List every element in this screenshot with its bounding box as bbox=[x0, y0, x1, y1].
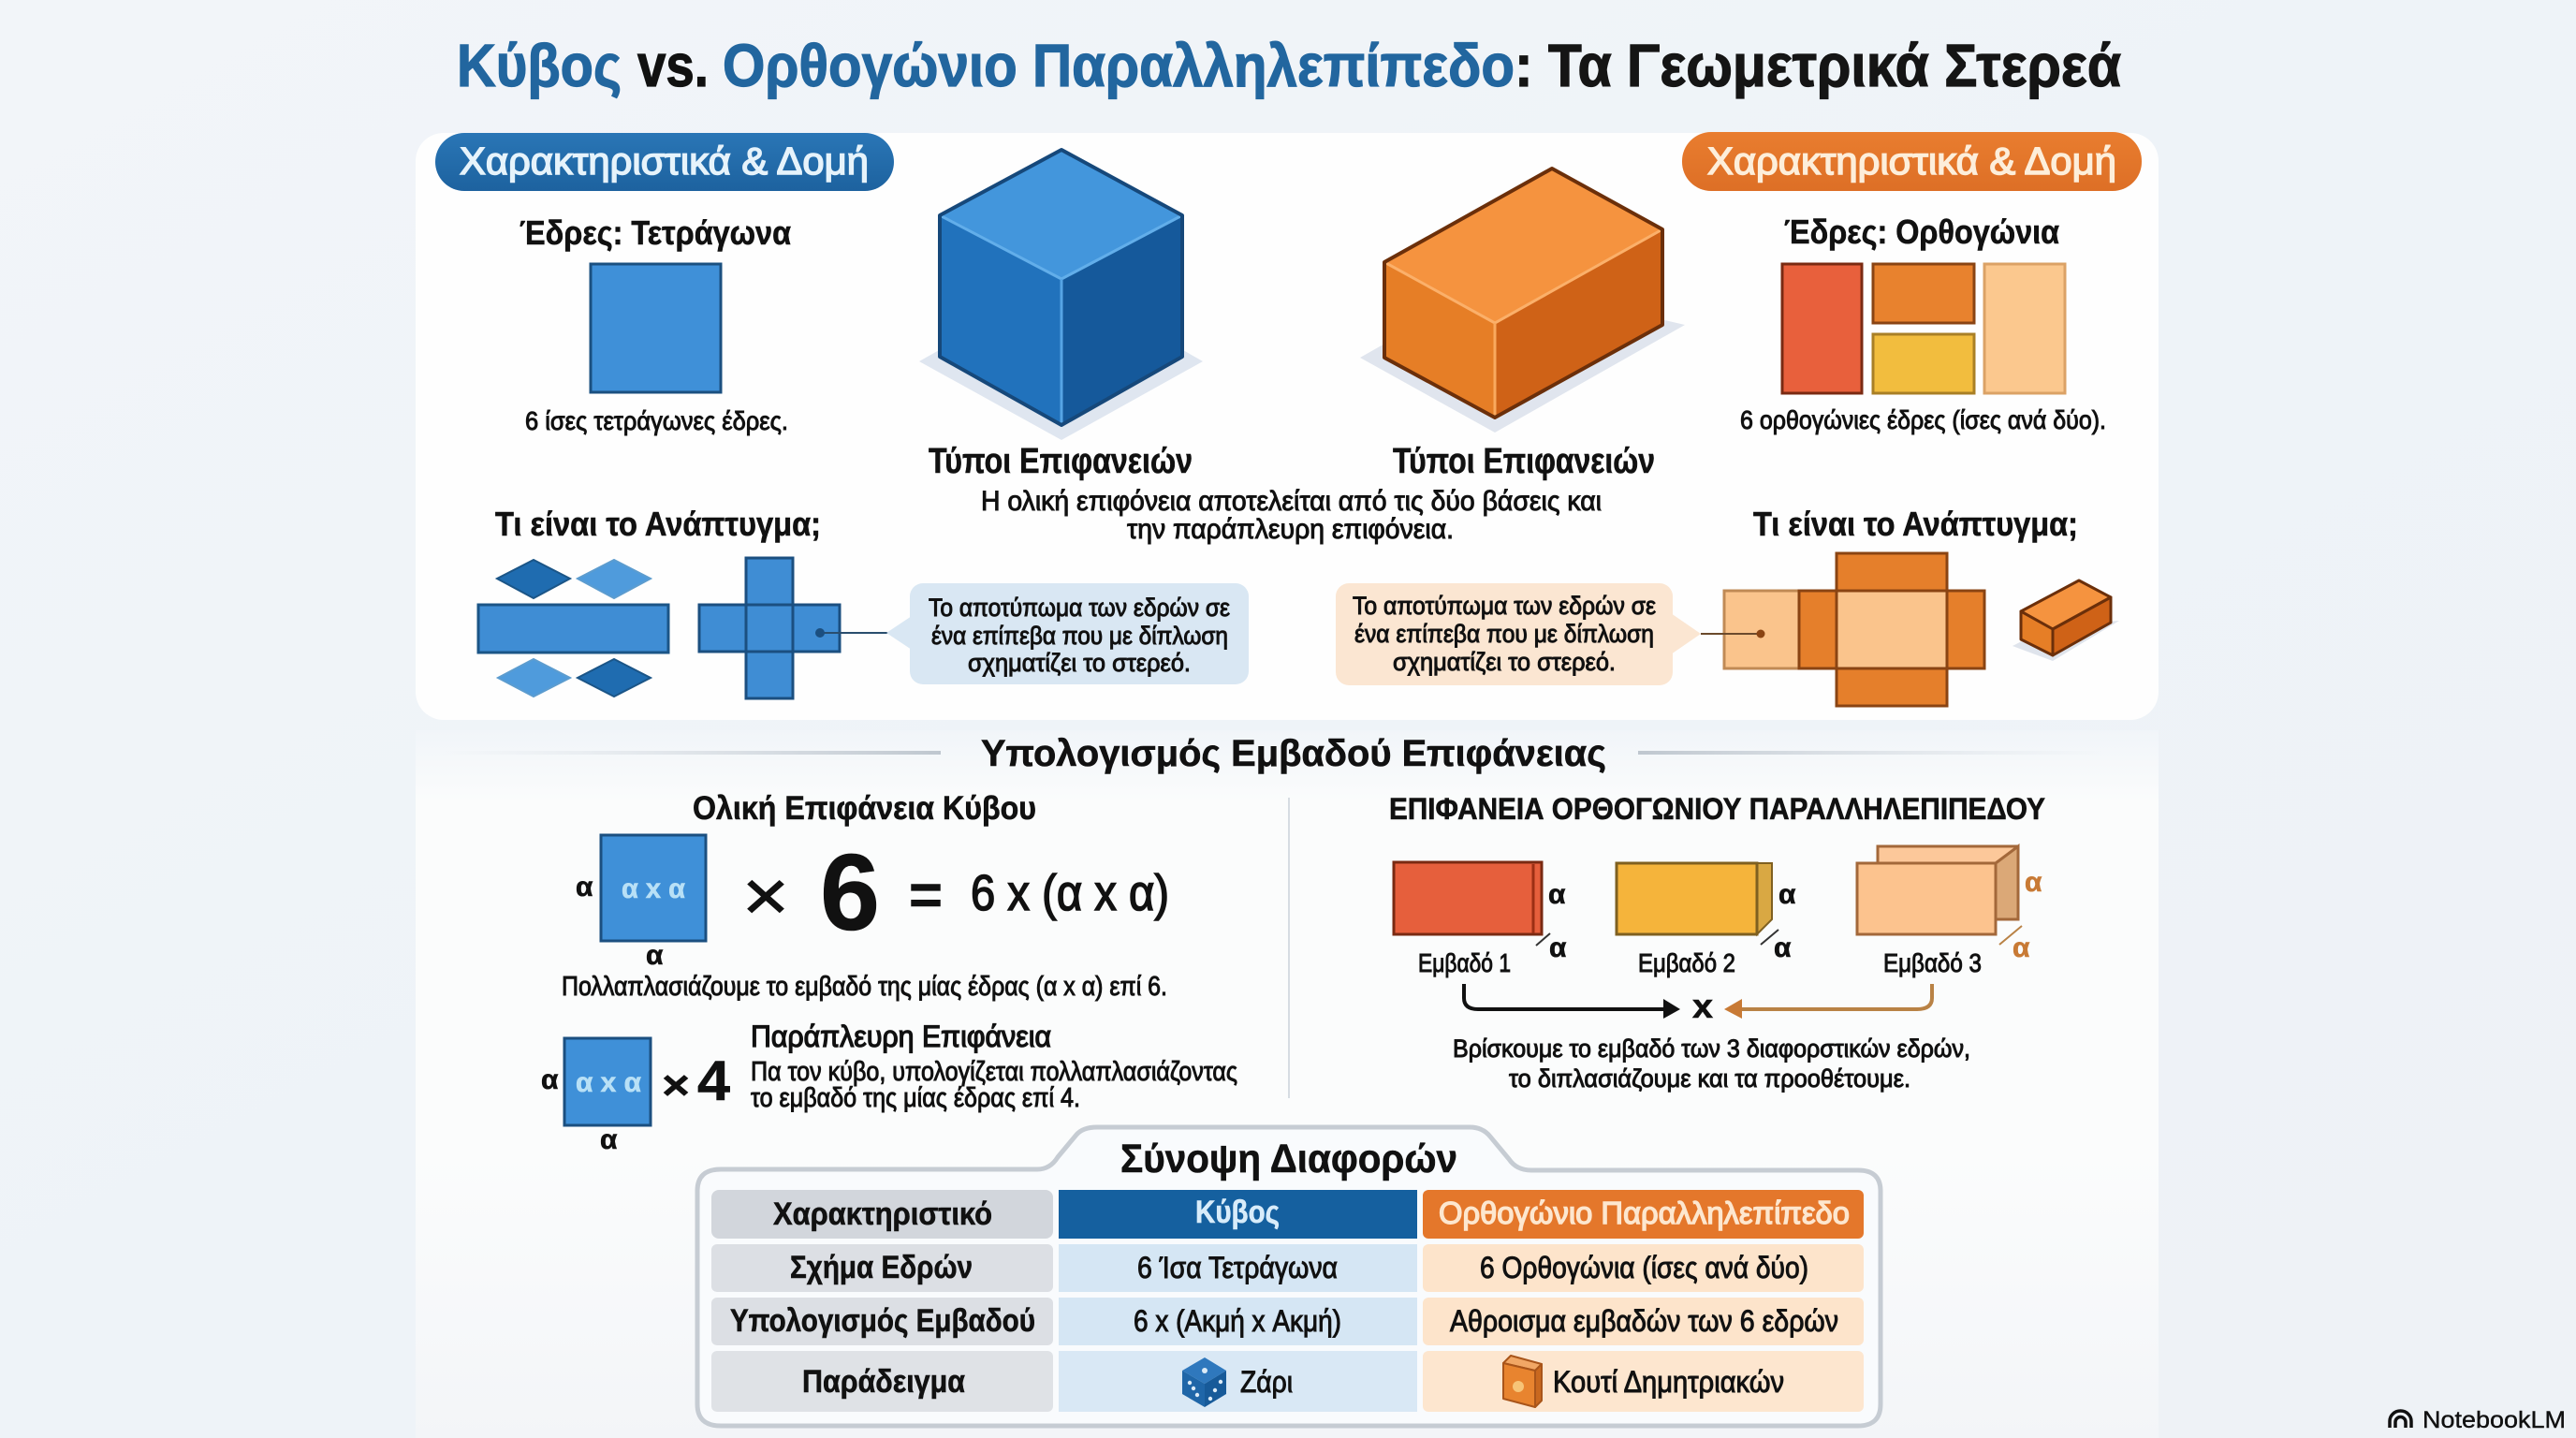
table column: cube: 6 Ίσα Τετράγωνα bbox=[1137, 1251, 1338, 1284]
callout: cuboid net definition bbox=[1336, 583, 1701, 685]
panel: cuboid surface bbox=[1389, 792, 2045, 1093]
icon: dice bbox=[1182, 1357, 1226, 1407]
icon: rectangular faces bbox=[1782, 264, 2065, 393]
cube faces block: 6 ίσες τετράγωνες έδρες. bbox=[525, 406, 788, 435]
icon: prism net bbox=[478, 560, 668, 697]
callout: cuboid net definition: σχηματίζει το στερεό. bbox=[1393, 648, 1616, 676]
cuboid faces block: Έδρες: Ορθογώνια bbox=[1784, 213, 2059, 251]
panel: cuboid surface: Εμβαδό 3 bbox=[1883, 948, 1982, 977]
section heading: surface area calculation bbox=[440, 733, 2106, 774]
callout: cube net definition bbox=[886, 583, 1249, 684]
formula: × bbox=[742, 857, 789, 936]
panel: cube total surface: α bbox=[576, 872, 593, 902]
badge: cuboid characteristics bbox=[1682, 132, 2142, 191]
table column: cuboid: Αθροισμα εμβαδών των 6 εδρών bbox=[1450, 1304, 1838, 1338]
title: : Τα Γεωμετρικά Στερεά bbox=[1515, 32, 2121, 99]
table column: features: Χαρακτηριστικό bbox=[773, 1196, 992, 1232]
icon: area 2 yellow face bbox=[1617, 863, 1778, 945]
formula bbox=[742, 831, 1169, 953]
badge: cube characteristics bbox=[435, 133, 894, 191]
surface types headings and description: την παράπλευρη επιφόνεια. bbox=[1127, 514, 1454, 545]
table column: cuboid: 6 Ορθογώνια (ίσες ανά δύο) bbox=[1480, 1251, 1808, 1284]
surface types headings and description: Τύποι Επιφανειών bbox=[1393, 442, 1655, 481]
badge: cube characteristics: Χαρακτηριστικά & Δομή bbox=[460, 139, 869, 183]
table column: cube bbox=[1059, 1190, 1417, 1412]
logo: NotebookLM: NotebookLM bbox=[2422, 1407, 2566, 1433]
table column: cuboid bbox=[1423, 1190, 1864, 1412]
panel: cuboid surface: Βρίσκουμε το εμβαδό των 3 διαφορστικών εδρών, bbox=[1453, 1034, 1970, 1063]
cube net block bbox=[478, 505, 889, 698]
section heading: surface area calculation: Υπολογισμός Εμβαδού Επιφάνειας bbox=[981, 733, 1606, 774]
surface types headings and description: Τύποι Επιφανειών bbox=[929, 442, 1193, 481]
cuboid net block bbox=[1701, 505, 2119, 706]
panel: cube lateral surface: το εμβαδό της μίας έδρας επί 4. bbox=[751, 1083, 1080, 1113]
icon: lateral face a x a bbox=[564, 1038, 651, 1125]
table column: features bbox=[711, 1190, 1053, 1412]
surface types headings and description bbox=[929, 442, 1655, 545]
formula: 6 x (α x α) bbox=[971, 865, 1169, 921]
icon: face a x a bbox=[601, 835, 706, 941]
title: Κύβος bbox=[457, 32, 622, 99]
table column: cube: 6 x (Ακμή x Ακμή) bbox=[1134, 1304, 1341, 1338]
panel: cube lateral surface: Παράπλευρη Επιφάνεια bbox=[751, 1020, 1051, 1053]
callout: cuboid net definition: Το αποτύπωμα των εδρών σε bbox=[1353, 592, 1656, 620]
icon: cereal box bbox=[1503, 1356, 1542, 1407]
cuboid faces block: 6 ορθογώνιες έδρες (ίσες ανά δύο). bbox=[1740, 405, 2106, 434]
formula: = bbox=[909, 863, 943, 928]
callout: cuboid net definition: ένα επίπεβα που με δίπλωση bbox=[1354, 620, 1654, 648]
title: vs. bbox=[637, 32, 709, 99]
panel: cuboid surface: το διπλασιάζουμε και τα προοθέτουμε. bbox=[1509, 1064, 1910, 1093]
icon: area 3 peach face bbox=[1857, 846, 2022, 945]
panel: cuboid surface: α bbox=[1548, 879, 1566, 910]
icon: cross net bbox=[699, 558, 840, 698]
title: Ορθογώνιο Παραλληλεπίπεδο bbox=[723, 32, 1515, 99]
panel: cube lateral surface: α bbox=[600, 1124, 618, 1155]
table column: features: Παράδειγμα bbox=[802, 1364, 965, 1400]
badge: cuboid characteristics: Χαρακτηριστικά & Δομή bbox=[1707, 139, 2116, 183]
table column: cuboid: Κουτί Δημητριακών bbox=[1553, 1365, 1784, 1399]
panel: cuboid surface: α bbox=[1774, 932, 1792, 963]
arrow: orange to multiply bbox=[1724, 984, 1932, 1019]
panel: cuboid surface: α bbox=[2025, 867, 2042, 898]
icon: face a x a: α x α bbox=[622, 873, 686, 904]
title bbox=[457, 32, 2121, 99]
panel: characteristics and structure bbox=[416, 133, 2159, 720]
table column: features: Υπολογισμός Εμβαδού bbox=[730, 1303, 1035, 1339]
panel: cube lateral surface: × bbox=[662, 1063, 690, 1108]
table: comparison bbox=[711, 1190, 1864, 1412]
callout: cube net definition: σχηματίζει το στερεό. bbox=[968, 649, 1191, 677]
icon: square face bbox=[591, 264, 721, 392]
panel: cube total surface: Πολλαπλασιάζουμε το εμβαδό της μίας έδρας (α x α) επί 6. bbox=[562, 972, 1167, 1002]
arrow: black to multiply bbox=[1464, 984, 1680, 1019]
panel: cuboid surface: ΕΠΙΦΑΝΕΙΑ ΟΡΘΟΓΩΝΙΟΥ ΠΑΡΑΛΛΗΛΕΠΙΠΕΔΟΥ bbox=[1389, 792, 2045, 826]
table column: cube: Ζάρι bbox=[1240, 1365, 1293, 1399]
panel: cube lateral surface: Πα τον κύβο, υπολογίζεται πολλαπλασιάζοντας bbox=[751, 1057, 1237, 1087]
panel: cube total surface bbox=[562, 790, 1169, 1002]
panel: cube total surface: Ολική Επιφάνεια Κύβου bbox=[693, 790, 1036, 827]
cube faces block: Έδρες: Τετράγωνα bbox=[520, 213, 791, 252]
icon: area 1 red face bbox=[1394, 862, 1550, 946]
icon: cuboid net bbox=[1724, 553, 1984, 706]
panel: cube lateral surface bbox=[541, 1020, 1237, 1155]
panel: cuboid surface: Εμβαδό 1 bbox=[1418, 948, 1511, 977]
cube net block: Τι είναι το Ανάπτυγμα; bbox=[495, 505, 821, 543]
panel: summary of differences: Σύνοψη Διαφορών bbox=[1120, 1137, 1457, 1181]
table column: features: Σχήμα Εδρών bbox=[790, 1250, 973, 1285]
panel: cuboid surface: Εμβαδό 2 bbox=[1638, 948, 1735, 977]
table column: cuboid: Ορθογώνιο Παραλληλεπίπεδο bbox=[1439, 1196, 1850, 1230]
panel: cuboid surface: α bbox=[1778, 879, 1796, 910]
panel: cuboid surface: α bbox=[1549, 932, 1567, 963]
panel: cube lateral surface: α bbox=[541, 1064, 559, 1095]
cube faces block bbox=[520, 213, 791, 435]
surface types headings and description: Η ολική επιφόνεια αποτελείται από τις δύο βάσεις και bbox=[981, 486, 1602, 517]
panel: cube lateral surface: 4 bbox=[697, 1049, 731, 1112]
icon: small cuboid bbox=[2012, 580, 2119, 661]
callout: cube net definition: ένα επίπεβα που με δίπλωση bbox=[931, 622, 1228, 650]
panel: cuboid surface: x bbox=[1692, 987, 1713, 1025]
panel: cuboid surface: α bbox=[2012, 932, 2030, 963]
panel: cube total surface: α bbox=[646, 940, 664, 971]
cuboid net block: Τι είναι το Ανάπτυγμα; bbox=[1753, 505, 2078, 543]
icon: 3D blue cube bbox=[919, 150, 1203, 440]
icon: lateral face a x a: α x α bbox=[576, 1067, 642, 1098]
formula: 6 bbox=[820, 831, 880, 953]
callout: cube net definition: Το αποτύπωμα των εδρών σε bbox=[929, 594, 1230, 622]
cuboid faces block bbox=[1740, 213, 2106, 434]
table column: cube: Κύβος bbox=[1195, 1195, 1280, 1230]
panel: summary of differences bbox=[697, 1127, 1881, 1426]
icon: 3D orange cuboid bbox=[1360, 169, 1685, 433]
